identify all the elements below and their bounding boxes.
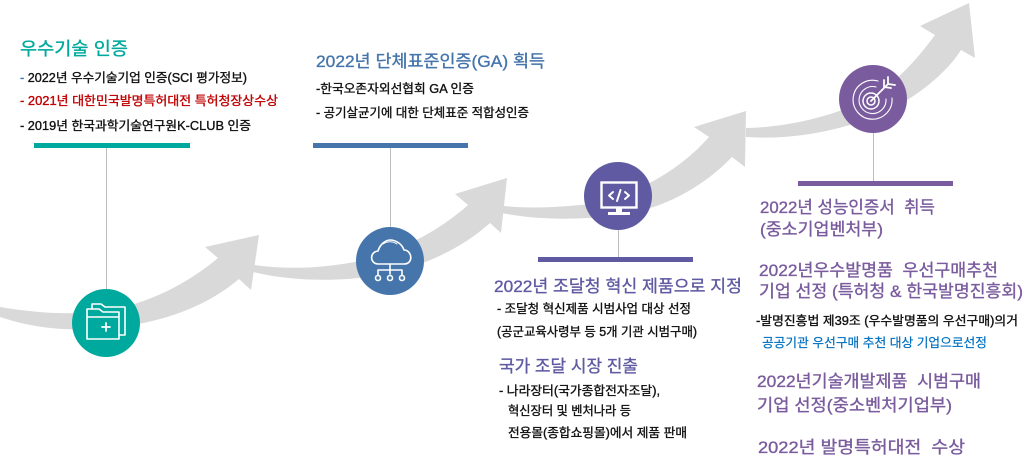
connector line — [390, 148, 392, 230]
connector line — [106, 148, 108, 292]
accent bar — [798, 181, 953, 186]
accent bar — [34, 143, 190, 148]
text: certification list: - 2022년 우수기술기업 인증(SCI 평가정보) — [20, 71, 247, 85]
icon: code monitor — [584, 162, 652, 230]
heading: technology development product: 2022년기술개발제품 시범구매 — [757, 372, 981, 391]
text: market channels: - 나라장터(국가종합전자조달), — [499, 384, 660, 398]
heading: excellent invention — [759, 261, 1023, 301]
text: standard list: - 공기살균기에 대한 단체표준 적합성인증 — [316, 106, 529, 120]
arrow 4 — [746, 3, 975, 138]
heading: excellent invention: 2022년우수발명품 우선구매추천 — [759, 261, 998, 280]
icon: target with arrow — [839, 65, 907, 133]
panel: step 1 technology certification — [20, 39, 279, 357]
text: market channels: 전용몰(종합쇼핑몰)에서 제품 판매 — [508, 426, 687, 440]
heading: technology development product — [757, 372, 981, 415]
subheading: 국가 조달 시장 진출 — [499, 357, 638, 376]
text: certification list: - 2019년 한국과학기술연구원K-CLUB 인증 — [20, 119, 251, 133]
text: certification list — [20, 71, 279, 133]
icon: cloud network — [356, 227, 424, 295]
text: certification list: - 2021년 대한민국발명특허대전 특허청장상수상 — [20, 94, 279, 108]
text: innovation product details: - 조달청 혁신제품 시범사업 대상 선정 — [497, 302, 691, 316]
panel: step 4 performance and awards — [756, 65, 1023, 457]
panel: step 3 public procurement — [494, 162, 742, 440]
text: legal basis: -발명진흥법 제39조 (우수발명품의 우선구매)의거 — [756, 314, 1018, 328]
text: standard list — [316, 82, 529, 120]
heading: excellent invention: 기업 선정 (특허청 & 한국발명진흥회) — [759, 282, 1023, 301]
heading: invention award: 2022년 발명특허대전 수상 — [758, 438, 965, 457]
heading: performance certificate: (중소기업벤처부) — [760, 220, 883, 239]
accent bar — [538, 257, 693, 262]
text: market channels — [499, 384, 687, 440]
heading: 우수기술 인증 — [20, 39, 128, 59]
arrow 1 — [0, 235, 259, 330]
panel: step 2 group standard certification — [313, 52, 545, 295]
icon: folder plus — [72, 289, 140, 357]
connector line — [872, 132, 874, 182]
heading: technology development product: 기업 선정(중소벤처기업부) — [757, 396, 952, 415]
arrow 3 — [502, 111, 746, 219]
text: standard list: -한국오존자외선협회 GA 인증 — [316, 82, 474, 96]
arrow 2 — [253, 178, 507, 280]
heading: performance certificate — [760, 198, 935, 239]
rising arrow path — [0, 3, 975, 330]
text: market channels: 혁신장터 및 벤처나라 등 — [508, 404, 631, 418]
accent bar — [313, 143, 468, 148]
heading: 2022년 조달청 혁신 제품으로 지정 — [494, 277, 742, 296]
text: innovation product details — [497, 302, 697, 339]
heading: 2022년 단체표준인증(GA) 획득 — [316, 52, 545, 71]
text: innovation product details: (공군교육사령부 등 5개 기관 시범구매) — [497, 325, 697, 339]
connector line — [618, 228, 620, 258]
text: legal basis: 공공기관 우선구매 추천 대상 기업으로선정 — [762, 335, 987, 350]
heading: performance certificate: 2022년 성능인증서 취득 — [760, 198, 935, 217]
text: legal basis — [756, 314, 1018, 350]
